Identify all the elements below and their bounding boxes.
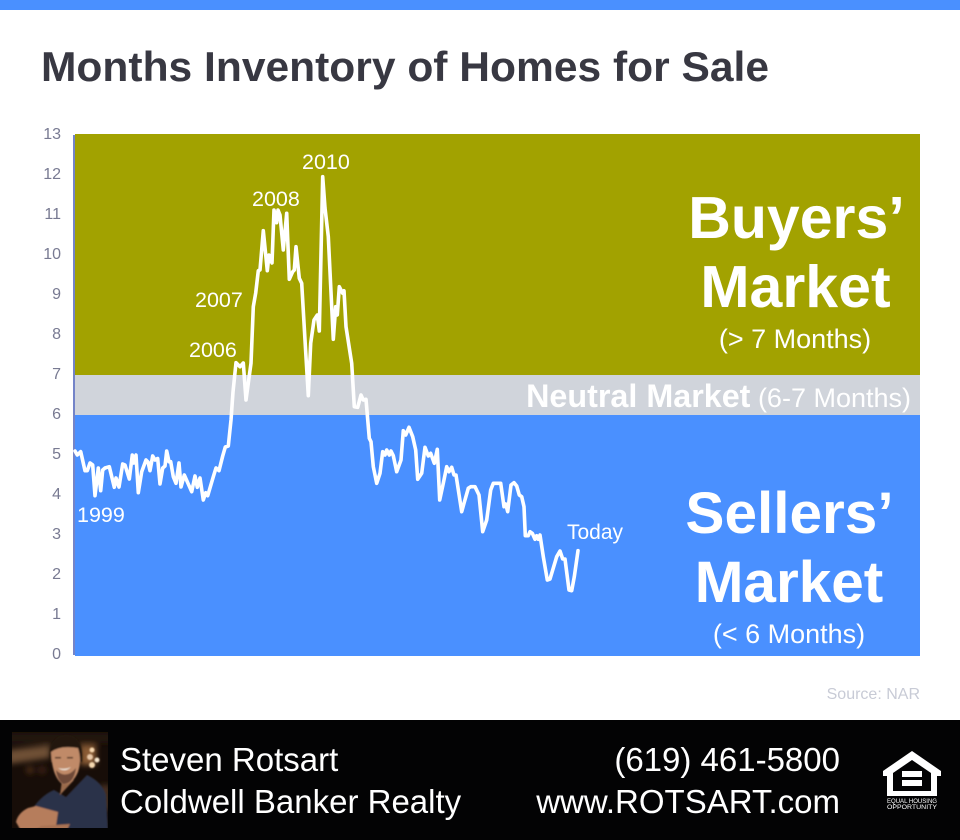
icon: equal housing opportunity bbox=[883, 751, 941, 811]
y axis labels: 1 bbox=[52, 606, 61, 623]
y axis labels: 7 bbox=[52, 366, 61, 383]
agent name and company bbox=[120, 741, 462, 820]
y axis labels: 9 bbox=[52, 286, 61, 303]
label: sellers market bbox=[685, 481, 894, 649]
label: buyers market bbox=[688, 185, 905, 354]
icon: equal housing opportunity: OPPORTUNITY bbox=[887, 804, 938, 811]
y axis labels: 2 bbox=[52, 566, 61, 583]
chart: months inventory bbox=[73, 134, 920, 656]
icon: equal housing opportunity: EQUAL HOUSING bbox=[887, 798, 937, 805]
agent name and company: Steven Rotsart bbox=[120, 741, 338, 778]
year labels: 2007 bbox=[195, 288, 243, 312]
label: sellers market: Market bbox=[695, 550, 883, 615]
footer bbox=[0, 720, 960, 840]
hair bbox=[49, 743, 84, 762]
year labels: 2010 bbox=[302, 150, 350, 174]
band: buyers market bbox=[75, 134, 920, 375]
band: neutral market bbox=[75, 375, 920, 415]
contact details: (619) 461-5800 bbox=[614, 741, 840, 778]
y axis labels: 6 bbox=[52, 406, 61, 423]
label: buyers market: (> 7 Months) bbox=[719, 324, 871, 354]
agent name and company: Coldwell Banker Realty bbox=[120, 783, 462, 820]
y axis labels: 11 bbox=[44, 206, 61, 223]
y axis labels: 4 bbox=[52, 486, 61, 503]
contact details: www.ROTSART.com bbox=[535, 783, 840, 820]
y axis labels: 8 bbox=[52, 326, 61, 343]
y axis labels: 0 bbox=[52, 646, 61, 663]
label: neutral market: Neutral Market (6-7 Months) bbox=[526, 378, 911, 414]
label: sellers market: Sellers’ bbox=[685, 481, 894, 546]
year labels: 2006 bbox=[189, 338, 237, 362]
year labels: Today bbox=[567, 521, 624, 544]
shirt bbox=[33, 775, 108, 830]
label: buyers market: Market bbox=[700, 254, 891, 320]
y axis labels: 13 bbox=[43, 126, 61, 143]
year labels: 2008 bbox=[252, 187, 300, 211]
agent photo bbox=[12, 732, 108, 828]
contact details bbox=[535, 741, 840, 820]
year labels: 1999 bbox=[77, 503, 125, 527]
y axis line bbox=[73, 135, 75, 655]
band: sellers market bbox=[75, 415, 920, 656]
y axis labels: 10 bbox=[43, 246, 61, 263]
top accent bar bbox=[0, 0, 960, 10]
y axis labels: 3 bbox=[52, 526, 61, 543]
source note: Source: NAR bbox=[827, 686, 920, 703]
year labels bbox=[77, 150, 624, 544]
label: sellers market: (< 6 Months) bbox=[713, 619, 865, 649]
label: buyers market: Buyers’ bbox=[688, 185, 905, 251]
y axis labels bbox=[43, 126, 61, 663]
y axis labels: 5 bbox=[52, 446, 61, 463]
forearms bbox=[16, 806, 58, 829]
title: Months Inventory of Homes for Sale bbox=[41, 43, 769, 90]
face bbox=[51, 747, 80, 784]
inventory line bbox=[75, 177, 578, 591]
y axis labels: 12 bbox=[43, 166, 61, 183]
